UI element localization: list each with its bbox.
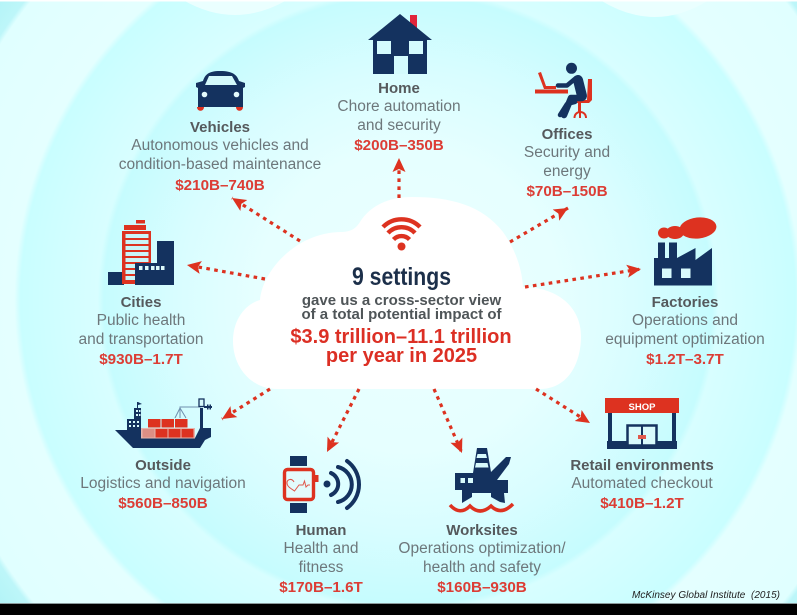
description line 2: and security	[357, 117, 441, 134]
icon: shop	[605, 398, 679, 449]
icon: shop: SHOP	[629, 402, 656, 413]
panel: home	[337, 14, 461, 154]
panel: offices	[524, 63, 610, 200]
cloud message	[290, 219, 512, 367]
label: Home	[378, 80, 420, 97]
description: Chore automation	[337, 98, 461, 115]
value: $200B–350B	[354, 137, 444, 154]
panel: worksites	[398, 448, 566, 596]
icon: house	[368, 14, 432, 74]
description: Automated checkout	[571, 475, 713, 492]
description: Health and	[284, 540, 358, 557]
value: $930B–1.7T	[99, 351, 184, 368]
label: Offices	[542, 126, 592, 143]
description: Public health	[97, 312, 185, 329]
panel: vehicles	[119, 71, 321, 194]
value: $1.2T–3.7T	[646, 351, 725, 368]
description: Logistics and navigation	[80, 475, 246, 492]
description: Autonomous vehicles and	[131, 137, 309, 154]
total impact value: $3.9 trillion–11.1 trillion	[290, 326, 512, 348]
panel: outside	[80, 399, 246, 512]
cloud text: gave us a cross-sector view	[302, 292, 501, 309]
icon: wifi	[383, 219, 420, 250]
central cloud	[233, 197, 581, 389]
description line 2: health and safety	[423, 559, 541, 576]
icon: factory	[654, 216, 717, 286]
icon: city buildings	[108, 220, 174, 285]
value: $170B–1.6T	[279, 579, 364, 596]
panel: cities	[79, 220, 203, 368]
label: Vehicles	[190, 119, 250, 136]
heading: 9 settings: 9 settings	[352, 263, 451, 291]
icon: smart watch	[284, 456, 359, 513]
icon: oil rig	[450, 448, 513, 511]
label: Outside	[135, 457, 191, 474]
total impact period: per year in 2025	[326, 345, 477, 367]
panel: retail environments	[570, 398, 714, 512]
value: $160B–930B	[437, 579, 527, 596]
arrows from the cloud to each setting	[187, 158, 641, 453]
icon: container ship	[115, 399, 212, 448]
value: $560B–850B	[118, 495, 208, 512]
label: Human	[296, 522, 346, 539]
value: $210B–740B	[175, 177, 265, 194]
value: $410B–1.2T	[600, 495, 685, 512]
description line 2: energy	[543, 163, 591, 180]
description line 2: equipment optimization	[605, 331, 765, 348]
panel: human	[279, 456, 364, 596]
description: Operations optimization/	[398, 540, 566, 557]
value: $70B–150B	[526, 183, 608, 200]
bottom black bar	[0, 603, 797, 615]
panel: factories	[605, 216, 765, 368]
description line 2: condition-based maintenance	[119, 156, 321, 173]
source note: McKinsey Global Institute (2015)	[632, 590, 780, 601]
label: Factories	[652, 294, 718, 311]
label: Cities	[121, 294, 161, 311]
label: Retail environments	[570, 457, 714, 474]
cloud text line 2: of a total potential impact of	[301, 306, 502, 323]
description line 2: and transportation	[79, 331, 203, 348]
description line 2: fitness	[299, 559, 344, 576]
icon: person at desk	[535, 63, 592, 118]
description: Operations and	[632, 312, 738, 329]
icon: car	[196, 71, 245, 111]
description: Security and	[524, 144, 610, 161]
label: Worksites	[446, 522, 518, 539]
